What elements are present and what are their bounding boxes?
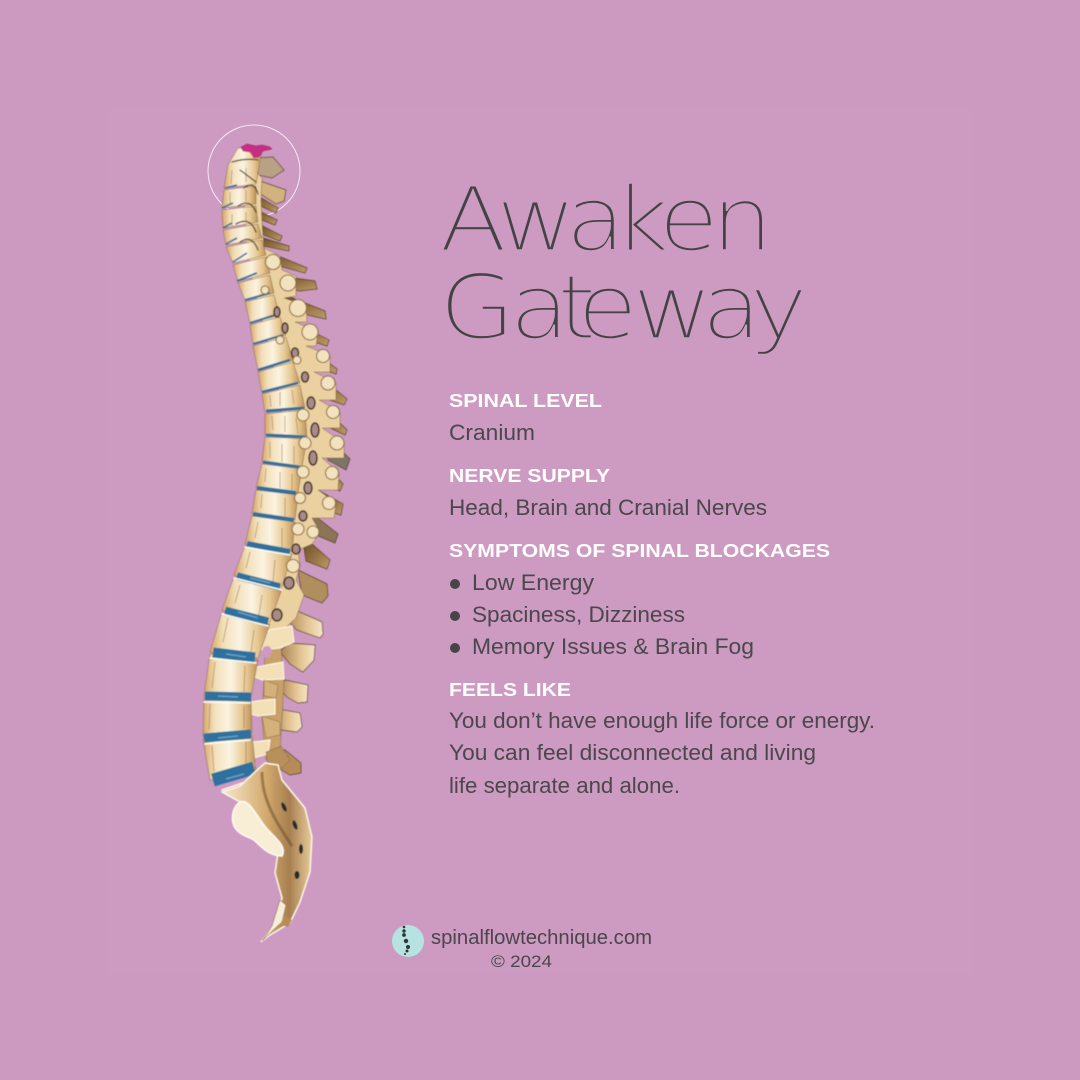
cervical joint lines <box>232 159 258 250</box>
section: symptoms list: Memory Issues & Brain Fog <box>472 634 754 659</box>
section: feels like: You don’t have enough life force or energy. <box>449 708 875 733</box>
section: symptoms list: Low Energy <box>472 570 594 595</box>
cranium marker: pink atlas <box>241 144 272 158</box>
section: feels like: life separate and alone. <box>449 773 680 798</box>
section: spinal level <box>449 391 602 445</box>
section: feels like <box>449 680 875 798</box>
section: spinal level: SPINAL LEVEL <box>449 391 602 411</box>
title <box>439 169 808 360</box>
inner panel <box>108 108 972 974</box>
spinous processes <box>254 157 350 775</box>
section: feels like: You can feel disconnected and living <box>449 740 816 765</box>
section: symptoms list <box>449 541 830 659</box>
sacrum and coccyx <box>222 763 312 942</box>
footer logo: spine dots <box>392 925 424 957</box>
circle highlight around cranium <box>208 125 300 217</box>
section: nerve supply: NERVE SUPPLY <box>449 466 610 486</box>
footer: website and copyright <box>431 927 652 971</box>
lumbar spinous blocks <box>270 610 323 775</box>
intervertebral discs <box>204 185 306 790</box>
section: symptoms list: SYMPTOMS OF SPINAL BLOCKAGES <box>449 541 830 561</box>
footer: website and copyright: © 2024 <box>491 952 552 971</box>
title: Awaken <box>439 169 773 272</box>
section: spinal level: Cranium <box>449 420 535 445</box>
vertebral bodies <box>203 148 307 780</box>
articular facets <box>261 254 344 572</box>
footer: website and copyright: spinalflowtechnique.com <box>431 927 652 949</box>
lumbar pedicles and articular column <box>250 626 294 768</box>
articular mass behind the facets <box>244 168 344 640</box>
section: symptoms list: Spaciness, Dizziness <box>472 602 685 627</box>
bone texture <box>209 168 298 772</box>
section: feels like: FEELS LIKE <box>449 680 571 700</box>
illustration: spine <box>203 144 350 942</box>
section: nerve supply <box>449 466 767 520</box>
intervertebral foramina <box>252 307 319 769</box>
title: Gateway <box>439 257 808 360</box>
section: nerve supply: Head, Brain and Cranial Nerves <box>449 495 767 520</box>
